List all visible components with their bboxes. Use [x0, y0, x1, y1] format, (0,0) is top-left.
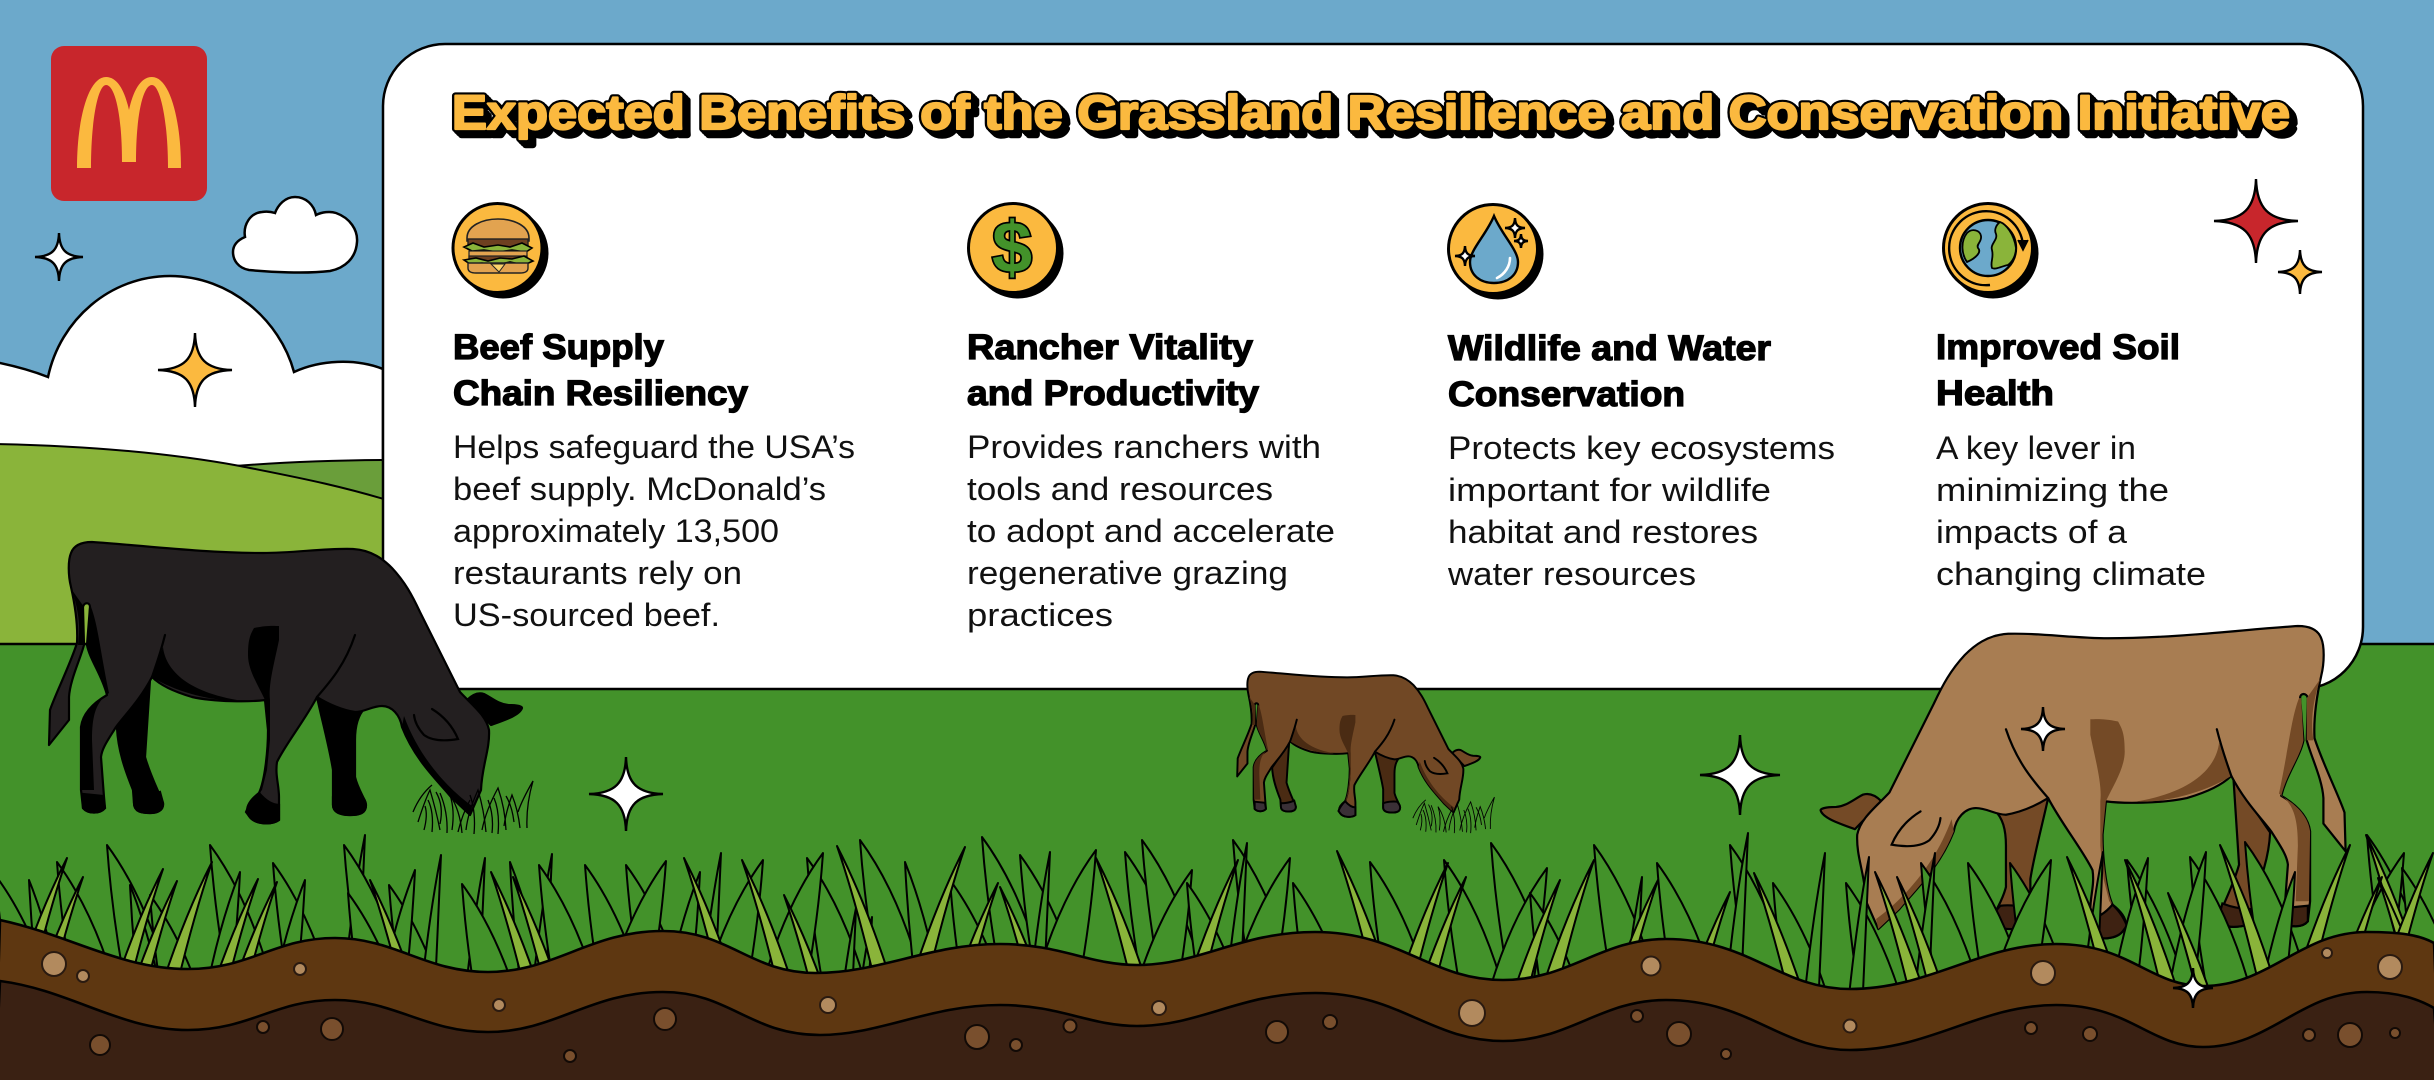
- icon: dollar coin: $: [992, 208, 1032, 288]
- heading: Chain Resiliency: [453, 374, 749, 413]
- body text: minimizing the: [1936, 472, 2169, 508]
- body text: US-sourced beef.: [453, 597, 720, 633]
- near hill: [0, 444, 400, 650]
- heading: Improved Soil: [1936, 328, 2180, 367]
- column: Improved Soil Health: [1936, 204, 2206, 592]
- body text: restaurants rely on: [453, 555, 742, 591]
- column: Beef Supply Chain Resiliency: [453, 204, 855, 633]
- body text: [967, 429, 1335, 633]
- icon: dollar coin: [968, 204, 1064, 298]
- heading: Conservation: [1448, 375, 1685, 414]
- far hill: [235, 460, 400, 560]
- body text: to adopt and accelerate: [967, 513, 1335, 549]
- title: Expected Benefits of the Grassland Resilience and Conservation Initiative: [452, 87, 2290, 140]
- grass tuft: under black cow: [413, 781, 533, 834]
- column: Wildlife and Water Conservation: [1447, 204, 1835, 592]
- heading: [967, 328, 1260, 413]
- logo: McDonald's golden arches: [51, 46, 207, 201]
- star: white on field right: [1700, 735, 1780, 815]
- star: gold on cloud: [158, 333, 232, 407]
- body text: habitat and restores: [1448, 514, 1758, 550]
- small cloud: [233, 197, 357, 273]
- star: white top left: [35, 233, 83, 281]
- icon: water drop: [1448, 204, 1544, 300]
- heading: [453, 328, 749, 413]
- heading: [1448, 329, 1771, 414]
- heading: Beef Supply: [453, 328, 665, 367]
- body text: practices: [967, 597, 1113, 633]
- cow: tan, right: [1821, 626, 2346, 938]
- body text: water resources: [1447, 556, 1696, 592]
- heading: [1936, 328, 2180, 413]
- column: Rancher Vitality and Productivity: [967, 204, 1335, 633]
- star: white on tan cow: [2021, 707, 2065, 751]
- pebbles: lower soil: [90, 1008, 2400, 1062]
- cow: brown, centre: [1237, 672, 1480, 817]
- star: red decoration: [2214, 179, 2298, 263]
- icon: earth with arrow: [1944, 204, 2038, 298]
- large cloud: [0, 276, 383, 520]
- green field: [0, 644, 2434, 1080]
- body text: [1936, 430, 2206, 592]
- heading: Wildlife and Water: [1448, 329, 1771, 368]
- heading: and Productivity: [967, 374, 1260, 413]
- body text: Protects key ecosystems: [1448, 430, 1835, 466]
- body text: impacts of a: [1936, 514, 2127, 550]
- body text: tools and resources: [967, 471, 1273, 507]
- body text: Provides ranchers with: [967, 429, 1321, 465]
- title: Expected Benefits of the Grassland Resilience and Conservation Initiative: [452, 87, 2290, 140]
- star: white on field left: [589, 757, 663, 831]
- body text: regenerative grazing: [967, 555, 1288, 591]
- body text: important for wildlife: [1448, 472, 1771, 508]
- grass blades: [0, 833, 2434, 1080]
- star: small gold decoration: [2278, 250, 2322, 294]
- grass tuft: under brown cow: [1413, 797, 1494, 833]
- soil: lower layer: [0, 981, 2434, 1080]
- panel: white card: [383, 44, 2363, 689]
- body text: approximately 13,500: [453, 513, 779, 549]
- soil: upper layer: [0, 920, 2434, 1080]
- body text: A key lever in: [1936, 430, 2136, 466]
- body text: [453, 429, 855, 633]
- body text: changing climate: [1936, 556, 2206, 592]
- icon: burger: [453, 204, 548, 298]
- heading: Health: [1936, 374, 2054, 413]
- body text: [1447, 430, 1835, 592]
- pebbles: upper soil: [42, 948, 2402, 1032]
- star: white on soil: [2173, 968, 2213, 1008]
- cow: black, left: [49, 542, 522, 823]
- body text: Helps safeguard the USA’s: [453, 429, 855, 465]
- body text: beef supply. McDonald’s: [453, 471, 826, 507]
- heading: Rancher Vitality: [967, 328, 1254, 367]
